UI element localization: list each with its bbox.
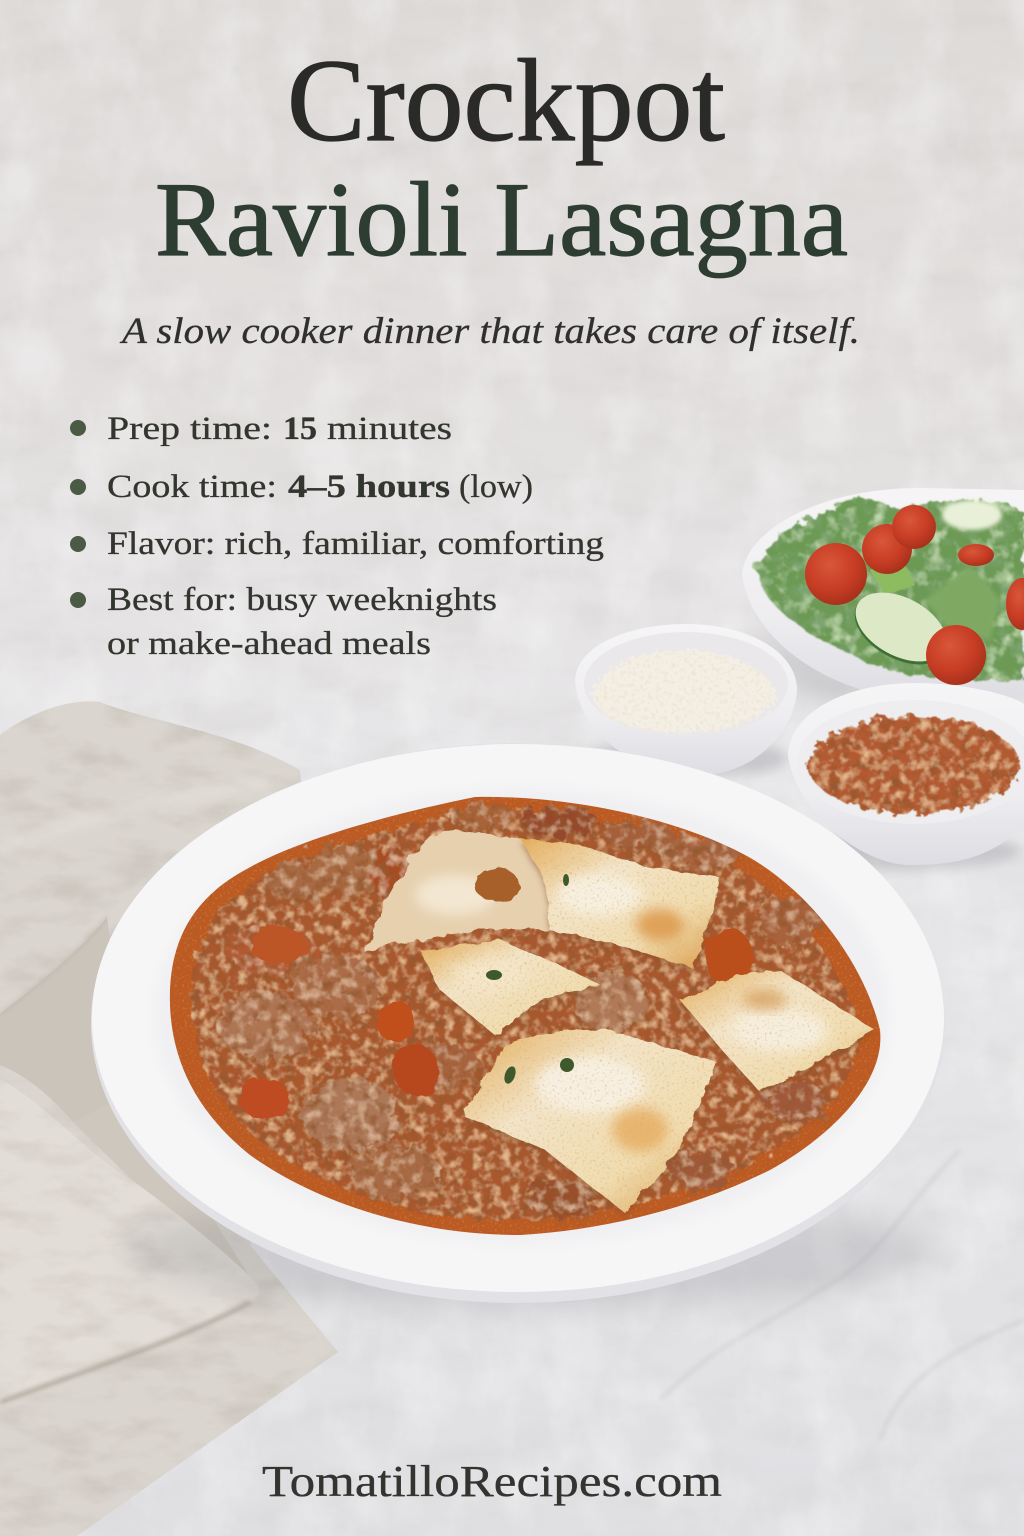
fact: best for: [70, 582, 497, 662]
sauce bowl: [788, 683, 1024, 870]
fact: cook time: 4–5 hours: [288, 469, 450, 505]
key facts list: [70, 411, 604, 662]
fact: best for: Best for: busy weeknights: [107, 582, 497, 618]
subtitle: A slow cooker dinner that takes care of itself.: [119, 311, 860, 352]
cucumber slice: [843, 579, 959, 679]
salad greens: [756, 495, 1024, 685]
herbs: [486, 874, 574, 1085]
fact: prep time: 15: [283, 411, 317, 447]
fact: flavor: Flavor: rich, familiar, comforting: [107, 526, 604, 562]
title: Ravioli Lasagna: [155, 161, 848, 278]
ravioli: center: [420, 940, 600, 1035]
parmesan bowl: [575, 624, 797, 778]
ravioli: right: [680, 970, 875, 1092]
fact: cook time: Cook time:: [107, 469, 277, 505]
fact: best for: or make-ahead meals: [107, 626, 431, 662]
fact: prep time: minutes: [327, 411, 452, 447]
sauce: [808, 716, 1020, 814]
tomatoes: [805, 505, 1024, 685]
tomato chunks: [239, 927, 753, 1118]
website footer: TomatilloRecipes.com: [262, 1457, 722, 1506]
dinner plate: [91, 743, 945, 1308]
title: [155, 35, 848, 278]
ravioli: [362, 830, 875, 1213]
ravioli: top right: [520, 838, 720, 968]
ravioli: cheese top left: [362, 830, 560, 950]
fact: cook time: (low): [459, 469, 533, 505]
grated parmesan: [592, 650, 777, 733]
ravioli: front: [463, 1030, 716, 1213]
title: Crockpot: [287, 35, 725, 166]
bolognese sauce: [170, 797, 880, 1235]
fact: prep time: [70, 411, 452, 447]
fact: prep time: Prep time:: [107, 411, 272, 447]
linen towel: [0, 701, 338, 1536]
fact: cook time: [70, 469, 533, 505]
ground meat: [191, 803, 859, 1222]
salad bowl: [740, 488, 1024, 710]
